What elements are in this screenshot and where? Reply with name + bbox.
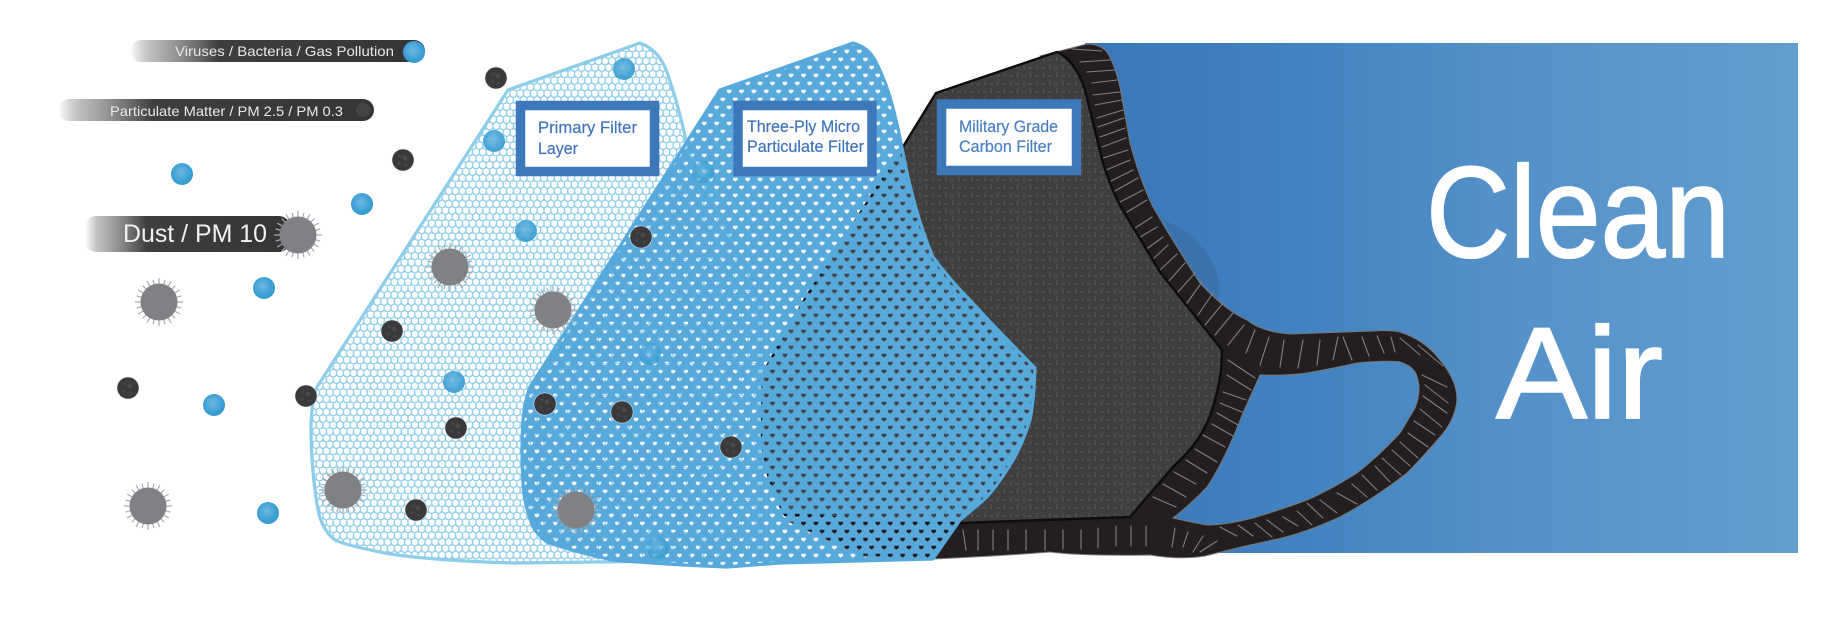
title: Clean Air: Clean: [1426, 139, 1730, 285]
legend: Viruses / Bacteria / Gas Pollution: [130, 40, 425, 63]
legend: Particulate Matter / PM 2.5 / PM 0.3: Particulate Matter / PM 2.5 / PM 0.3: [110, 103, 343, 119]
icons: blue virus particles: [171, 58, 714, 559]
callout: Three-Ply Micro Particulate Filter: Particulate Filter: [747, 137, 864, 156]
callout: Primary Filter Layer: Primary Filter: [538, 118, 637, 137]
callout: Military Grade Carbon Filter: Military Grade: [959, 117, 1058, 136]
panel: primary filter layer mesh: [311, 43, 760, 563]
callout: Three-Ply Micro Particulate Filter: Three-Ply Micro: [747, 117, 860, 136]
callout: Three-Ply Micro Particulate Filter: [738, 106, 872, 172]
title: Clean Air: [1426, 139, 1730, 446]
legend: Particulate Matter / PM 2.5 / PM 0.3: [58, 99, 374, 121]
legend: Viruses / Bacteria / Gas Pollution: Viruses / Bacteria / Gas Pollution: [175, 43, 394, 59]
legend: Dust / PM 10: Dust / PM 10: [123, 220, 267, 248]
legend: Dust / PM 10: [85, 211, 322, 259]
panel: military grade carbon filter fabric: [762, 52, 1222, 523]
callout: Primary Filter Layer: [520, 106, 654, 172]
panel: three-ply micro particulate filter mesh: [522, 43, 1035, 567]
title: Clean Air: Air: [1496, 300, 1663, 446]
callout: Primary Filter Layer: Layer: [538, 139, 578, 158]
callout: Military Grade Carbon Filter: [942, 104, 1076, 170]
blue clean air band: [1085, 43, 1798, 553]
icons: black particulate matter particles: [116, 66, 742, 522]
icons: grey dust particles: [124, 243, 600, 534]
mask: black binding and ear loop: [785, 44, 1457, 559]
mask: rear strap shadow: [1163, 220, 1219, 300]
callout: Military Grade Carbon Filter: Carbon Filter: [959, 137, 1052, 156]
